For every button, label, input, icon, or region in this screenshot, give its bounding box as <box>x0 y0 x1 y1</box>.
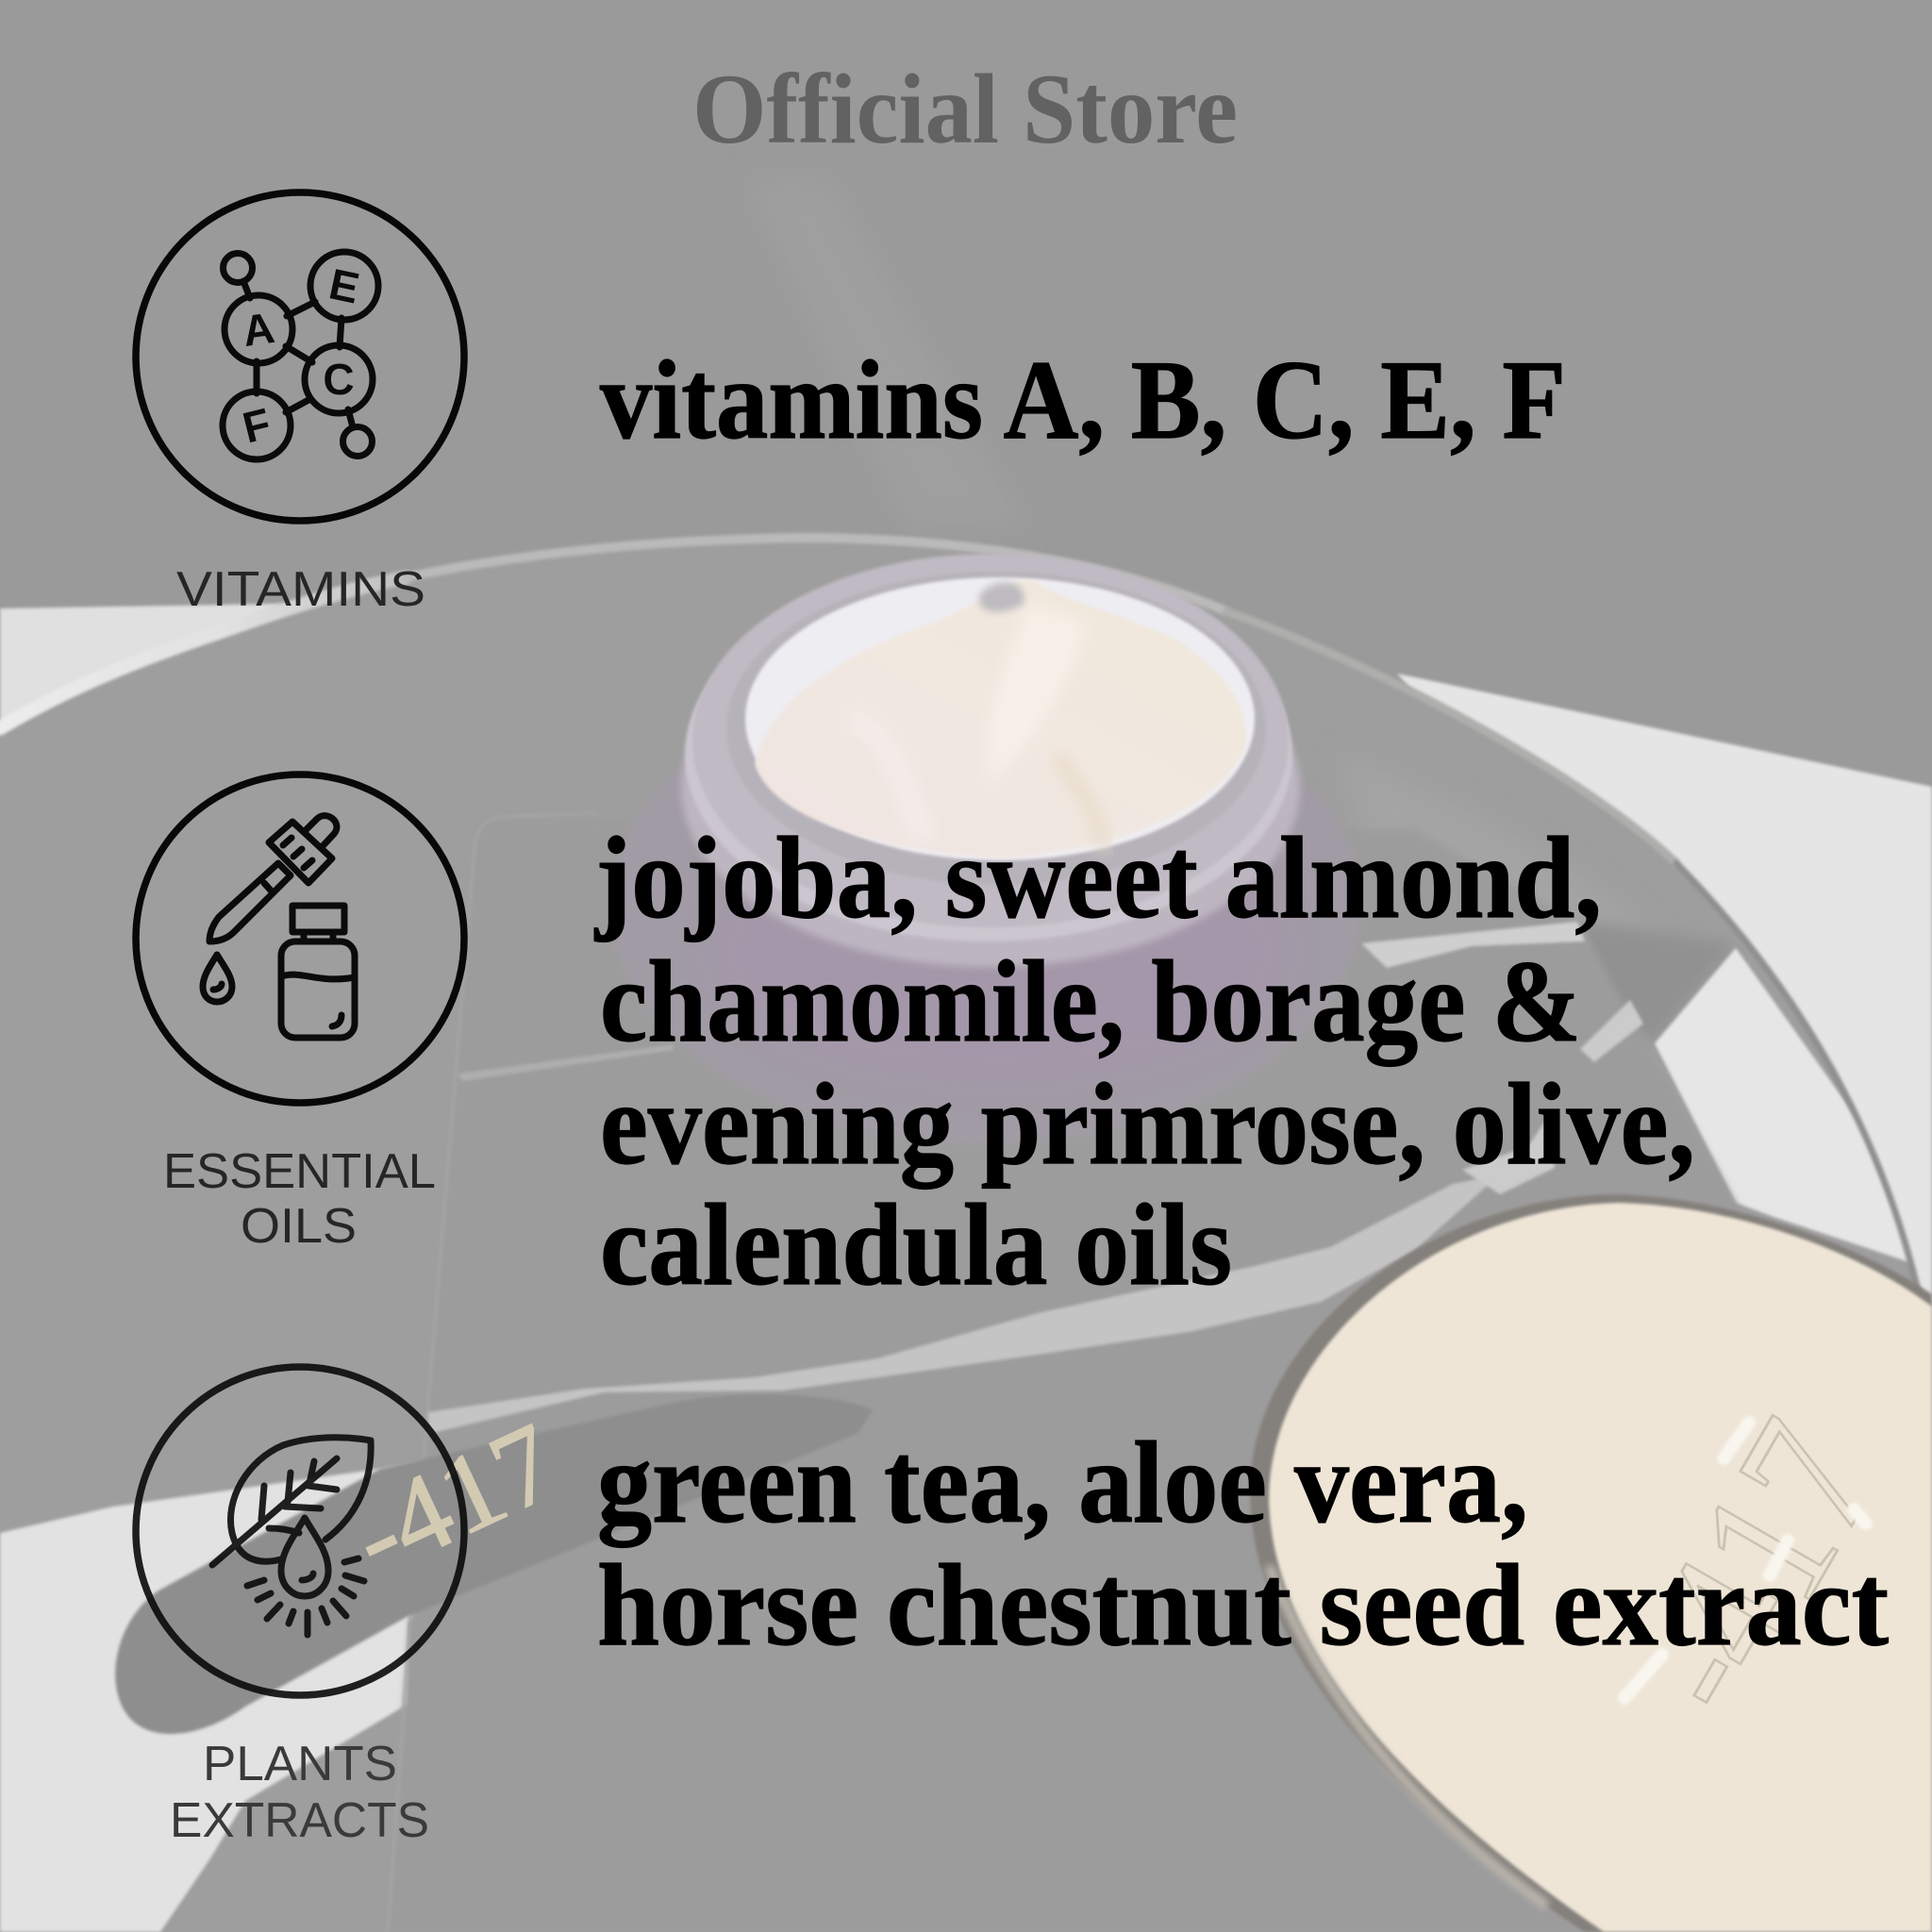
light beam on the wall <box>745 179 1028 528</box>
ingredient text: plant extracts list: horse chestnut seed extract <box>597 1541 1889 1670</box>
cream swirl highlights <box>988 604 1085 783</box>
icon: vitamins molecule in circle: E <box>325 258 363 313</box>
lid lower lip shadow <box>1269 1566 1547 1906</box>
label: essential oils: ESSENTIAL <box>163 1144 436 1199</box>
icon: vitamins molecule in circle: A <box>240 303 277 356</box>
icon: vitamins molecule in circle: C <box>323 355 355 404</box>
icon: vitamins molecule in circle <box>136 192 464 521</box>
gold lettering on spatula: -417 <box>334 1399 575 1600</box>
marble white veins <box>428 922 1643 1434</box>
marble slab left edge highlight <box>388 813 596 1932</box>
label: vitamins: VITAMINS <box>176 562 425 617</box>
ingredient text: plant extracts list <box>597 1418 1889 1670</box>
cream surface <box>745 577 1255 860</box>
lid rim <box>1250 1194 1932 1932</box>
plate interior <box>0 540 1932 1932</box>
title: Official Store <box>692 54 1238 164</box>
ingredient text: essential oils list: calendula oils <box>600 1180 1232 1309</box>
white table, lower left <box>0 1434 566 1932</box>
label: essential oils <box>163 1144 436 1254</box>
label: plants extracts: PLANTS <box>203 1737 397 1791</box>
icon: plant extract leaf and drop in circle <box>136 1367 464 1695</box>
heading text: vitamins list: vitamins A, B, C, E, F <box>600 337 1566 462</box>
ingredient text: essential oils list <box>593 813 1695 1309</box>
jar body <box>610 668 1361 1143</box>
icon: essential oil dropper and bottle in circle <box>136 774 464 1103</box>
plate white reflection <box>1655 948 1915 1264</box>
jar glass rings <box>681 608 1300 967</box>
white table, upper left <box>0 604 283 731</box>
label: essential oils: OILS <box>241 1199 357 1254</box>
plate light area on the right <box>1340 755 1698 1189</box>
label: plants extracts: EXTRACTS <box>170 1793 429 1848</box>
ingredient text: essential oils list: jojoba, sweet almond, <box>593 813 1602 942</box>
plate rim <box>0 538 1924 1321</box>
icon: vitamins molecule in circle: F <box>238 398 275 453</box>
plate dark reflection <box>1577 920 1736 1043</box>
spatula <box>115 1394 873 1734</box>
white table, upper right <box>1397 674 1932 1932</box>
marble slab <box>388 819 1932 1932</box>
label: plants extracts <box>170 1737 429 1848</box>
jar base tint <box>708 821 1292 1085</box>
ingredient text: essential oils list: evening primrose, olive, <box>600 1059 1695 1190</box>
lid top <box>1269 1203 1932 1932</box>
ingredient text: plant extracts list: green tea, aloe vera, <box>597 1418 1528 1548</box>
ingredient text: essential oils list: chamomile, borage & <box>600 937 1581 1067</box>
